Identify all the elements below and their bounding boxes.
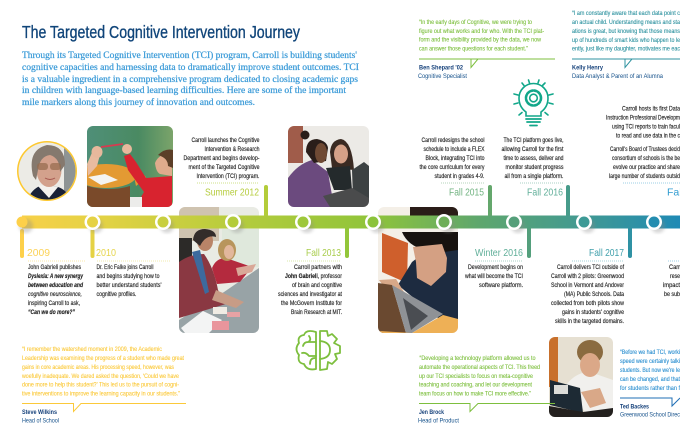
milestone: Fall 2017: Carroll with 2 pilots: Greenwood: [551, 274, 624, 280]
milestone: 2010: better understand students': [96, 283, 162, 289]
milestone: Fall 2016: Fall 2016: [527, 186, 563, 198]
quote: Kelly Henry: [572, 11, 680, 80]
milestone: Fall 2013: [278, 247, 343, 316]
milestone: 2010: Dr. Eric Falke joins Carroll: [96, 265, 154, 271]
intro text block: cognitive capacities and harnessing data to dramatically improve student outcomes. TCI: [22, 62, 359, 73]
quote: Jen Brock: Jen Brock: [419, 409, 444, 416]
milestone: 2010: and begins studying how to: [96, 274, 160, 280]
milestone: Fall 2015: schedule to include a FLEX: [424, 147, 484, 153]
milestone: Fall 2013: sciences and investigator at: [278, 292, 342, 298]
milestone: Winter 2016: [464, 247, 523, 289]
quote: Jen Brock: team focus on how to make TCI more effective.”: [419, 392, 531, 398]
milestone: Summer 2012: Carroll launches the Cognitive: [192, 138, 260, 144]
milestone: Fall 2017: Carroll delivers TCI outside of: [557, 265, 624, 271]
milestone: Fall 2016: all from a single platform.: [504, 174, 564, 180]
quote: Steve Wilkins: Leadership was examining the progress of a student who made great: [22, 356, 184, 362]
milestone: Summer 2012: [184, 138, 260, 198]
quote: Steve Wilkins: “I remember the watershed moment in 2009, the Academic: [22, 347, 162, 353]
milestone: Summer 2012: Summer 2012: [205, 186, 259, 198]
milestone: 2009: 2009: [27, 247, 50, 259]
milestone: Winter 2016: software platform.: [479, 283, 523, 289]
milestone: Fall 2015: student in grades 4-9.: [434, 174, 485, 180]
quote: Ben Shepard: Ben Shepard '02: [419, 64, 463, 72]
milestone: Fall 2015: Carroll redesigns the school: [422, 138, 484, 144]
intro text block: in children with language-based learning difficulties. Here are some of the important: [22, 85, 346, 96]
milestone: 2010: [96, 247, 171, 298]
quote: Ben Shepard: can answer those questions for each student.”: [419, 46, 528, 52]
milestone: Fall 2013: of brain and cognitive: [292, 283, 343, 289]
quote: Steve Wilkins: Head of School: [22, 418, 59, 424]
milestone: Winter 2016: what will become the TCI: [464, 274, 523, 280]
milestone: Fall 2017: gains in students' cognitive: [562, 310, 625, 316]
milestone: 2010: cognitive profiles.: [96, 292, 137, 298]
quote: Ted Backes: Ted Backes: [620, 404, 649, 410]
milestone: Fall 2017: Fall 2017: [589, 247, 624, 259]
milestone: Fall 2017: [551, 247, 625, 325]
quote: Jen Brock: [418, 356, 555, 424]
milestone: Fall 2017: collected from both pilots show: [551, 301, 625, 307]
quote: Jen Brock: teaching and coaching, and let our development: [419, 382, 532, 388]
milestone: Summer 2012: Intervention (TCI) program.: [196, 174, 260, 180]
milestone: Fall 2015: [420, 138, 485, 198]
quote: Ben Shepard: form and the visibility provided by the data, we now: [419, 38, 542, 44]
milestone: cropped right edge: [663, 261, 680, 298]
milestone: Fall 2013: Brain Research at MIT.: [291, 310, 342, 316]
quote: Jen Brock: up our TCI specialists to focus on meta-cognitive: [419, 374, 534, 380]
milestone: Winter 2016: Development begins on: [468, 265, 523, 271]
milestone: Summer 2012: Department and begins develop-: [184, 156, 260, 162]
intro text block: is a valuable ingredient in a comprehensive program dedicated to closing academic gaps: [22, 74, 358, 85]
quote: Jen Brock: Head of Product: [418, 418, 459, 424]
milestone: Fall 2016: allowing Carroll for the first: [502, 147, 564, 153]
milestone: 2009: [27, 247, 86, 316]
quote: Steve Wilkins: gains in core academic areas. His processing speed, however, was: [22, 365, 174, 371]
milestone: Fall 2015: Block, integrating TCI into: [426, 156, 485, 162]
quote: Steve Wilkins: [21, 347, 186, 424]
photo: student with red sweater: [87, 126, 173, 207]
milestone: Fall 2013: Fall 2013: [306, 247, 341, 259]
milestone: Fall 2013: Carroll partners with: [294, 265, 342, 271]
quote: Kelly Henry: Kelly Henry: [572, 64, 603, 72]
timeline markers: [16, 214, 665, 233]
milestone: Fall 2015: Fall 2015: [449, 186, 484, 198]
milestone: Fall 2015: the core curriculum for every: [420, 165, 484, 171]
photo: two students at computer: [288, 126, 369, 207]
photo: boy with laptop (Greenwood): [549, 337, 613, 417]
quote: Ben Shepard: Cognitive Specialist: [418, 73, 467, 80]
photo: boy at laptop: [378, 207, 458, 333]
milestone: 2009: cognitive neuroscience,: [28, 292, 82, 298]
photo: teacher and student at table: [179, 207, 259, 333]
quote: Jen Brock: “Developing a technology platform allowed us to: [420, 356, 536, 362]
milestone: Winter 2016: Winter 2016: [475, 247, 523, 259]
icon: light bulb with gear: [514, 80, 553, 126]
title: The Targeted Cognitive Intervention Journey: [22, 22, 300, 42]
milestone: Fall 2013: the McGovern Institute for: [281, 301, 342, 307]
milestone: 2009: between education and: [28, 283, 83, 289]
milestone: Fall 2016: monitor student progress: [506, 165, 564, 171]
quote: Steve Wilkins: Steve Wilkins: [22, 409, 57, 416]
milestone: 2010: 2010: [96, 247, 116, 259]
milestone: Fall 2016: The TCI platform goes live,: [504, 138, 564, 144]
milestone: Fall 2017: skills in the targeted domains.: [555, 319, 624, 325]
milestone: Fall 2013: John Gabrieli, professor: [285, 274, 342, 280]
milestone: Fall 2017: (MA) Public Schools. Data: [564, 292, 625, 298]
quote: Steve Wilkins: woefully inadequate. We dared asked the question, ‘Could we have: [21, 374, 180, 380]
quote: Kelly Henry: Data Analyst & Parent of an Alumna: [572, 73, 664, 80]
intro text block: [22, 50, 359, 108]
milestone: Summer 2012: Intervention & Research: [204, 147, 260, 153]
milestone: Fall 2017: School in Vermont and Andover: [551, 283, 624, 289]
intro text block: Through its Targeted Cognitive Intervention (TCI) program, Carroll is building students': [22, 50, 357, 61]
vertical date ticks: [20, 185, 632, 258]
milestone: 2009: “Can we do more?”: [28, 310, 75, 316]
quote: Ted Backes: [620, 350, 680, 418]
quote: Steve Wilkins: tive interventions to improve the learning capacity in our students.”: [22, 392, 180, 398]
milestone: data professional development (cropped): [606, 106, 680, 198]
intro text block: mile markers along this journey of innovation and outcomes.: [22, 97, 255, 108]
milestone: 2009: inspiring Carroll to ask,: [28, 301, 80, 307]
quote: Ben Shepard: “In the early days of Cognitive, we were trying to: [419, 20, 533, 26]
milestone: Summer 2012: ment of the Targeted Cognitive: [188, 165, 260, 171]
milestone: 2009: John Gabrieli publishes: [28, 265, 81, 271]
milestone: 2009: Dyslexia: A new synergy: [28, 274, 84, 280]
quote: Ben Shepard: figure out what works and for who. With the TCI plat-: [419, 29, 544, 35]
timeline bar: [22, 216, 680, 228]
quote: Ben Shepard: [418, 20, 555, 80]
milestone: Fall 2016: [502, 138, 564, 198]
quote: Jen Brock: automate the operational aspects of TCI. This freed: [419, 365, 540, 371]
portrait: John Gabrieli: [17, 141, 77, 204]
milestone: Fall 2016: time to assess, deliver and: [504, 156, 564, 162]
quote: Steve Wilkins: done more to help this student?’ This led us to the pursuit of cogni-: [22, 382, 179, 388]
icon: brain and gear: [296, 331, 340, 370]
